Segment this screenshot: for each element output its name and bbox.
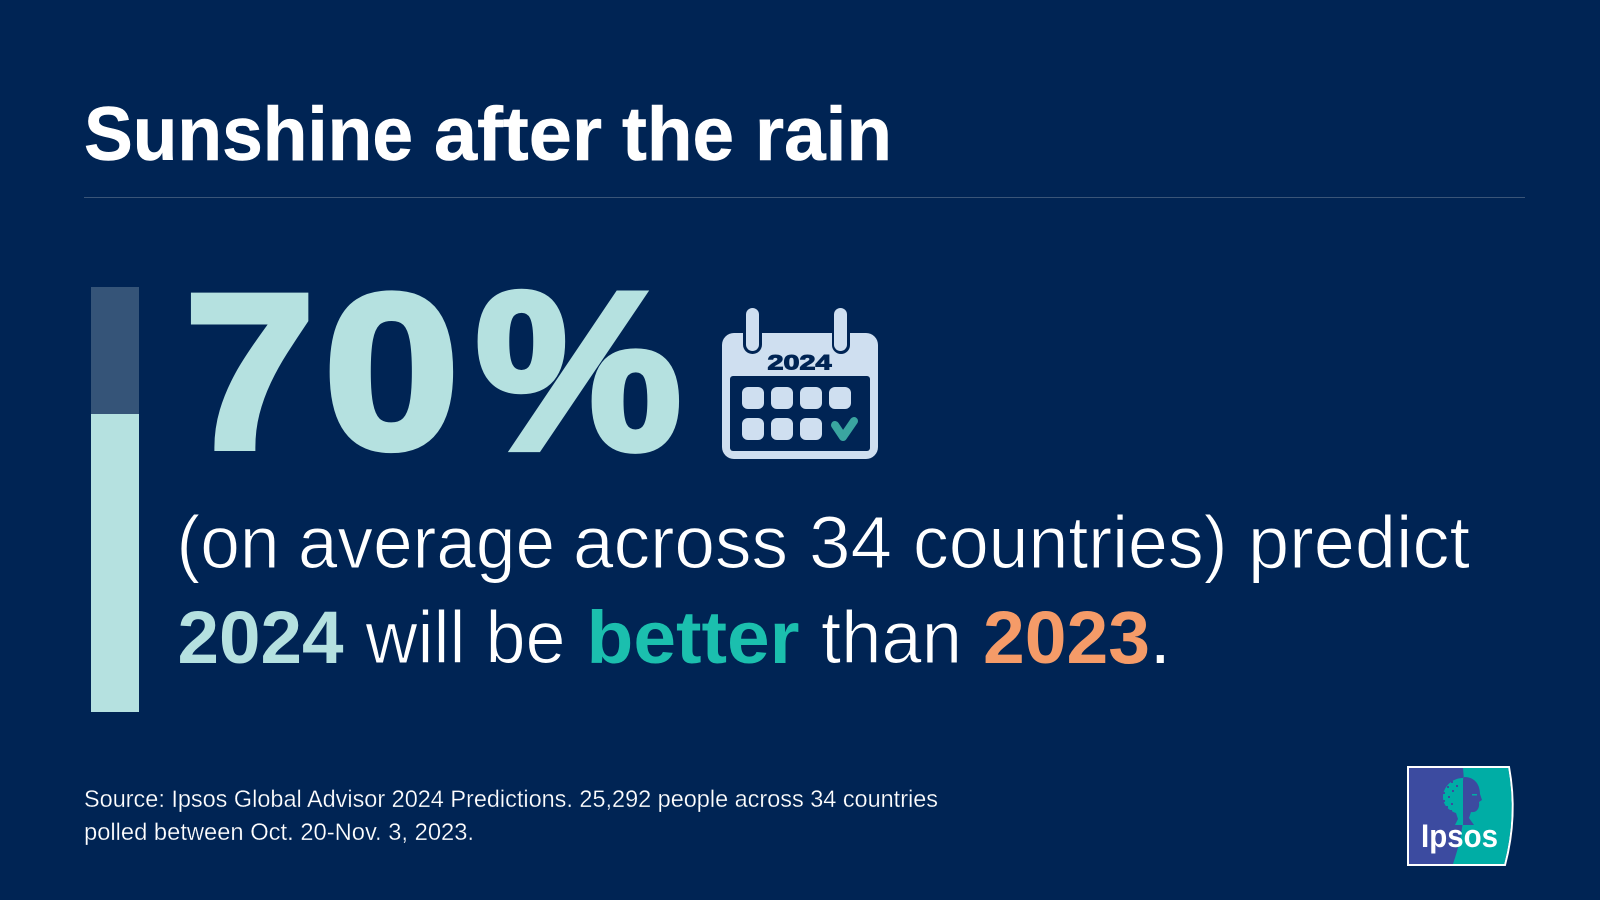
statement line 1 xyxy=(176,501,1470,584)
statement line 1: average xyxy=(298,501,555,584)
logo: Ipsos: Ipsos xyxy=(1421,818,1498,854)
icon: calendar 2024: 2024 xyxy=(768,352,832,374)
statement line 1: countries) xyxy=(913,501,1228,584)
statement line 2 xyxy=(178,596,1171,679)
title: rain xyxy=(755,92,892,177)
statement line 1: predict xyxy=(1248,501,1470,584)
statement line 1: 34 xyxy=(809,501,892,584)
statement line 2: will be xyxy=(365,596,566,679)
statement line 2: 2023 xyxy=(983,596,1150,679)
source note: polled between Oct. 20-Nov. 3, 2023. xyxy=(84,819,474,846)
big number: 70%: 7 xyxy=(185,249,315,495)
big number: 70%: % xyxy=(476,247,681,497)
statement line 2: 2024 xyxy=(178,596,344,679)
statement line 2: . xyxy=(1150,596,1171,679)
title xyxy=(84,92,892,177)
statement line 1: across xyxy=(573,501,788,584)
title: Sunshine xyxy=(84,92,413,177)
title: after xyxy=(434,92,602,177)
logo: Ipsos xyxy=(1408,767,1513,865)
big number: 70%: 0 xyxy=(324,249,459,495)
big number: 70% xyxy=(185,247,681,497)
statement line 2: than xyxy=(821,596,962,679)
statement line 1: (on xyxy=(176,501,280,584)
source note: Source: Ipsos Global Advisor 2024 Predictions. 25,292 people across 34 countries xyxy=(84,786,938,813)
source note xyxy=(84,786,938,846)
icon: calendar 2024 xyxy=(722,305,878,459)
statement line 2: better xyxy=(586,596,800,679)
title: the xyxy=(622,92,734,177)
progress bar: 70 percent xyxy=(91,287,139,712)
